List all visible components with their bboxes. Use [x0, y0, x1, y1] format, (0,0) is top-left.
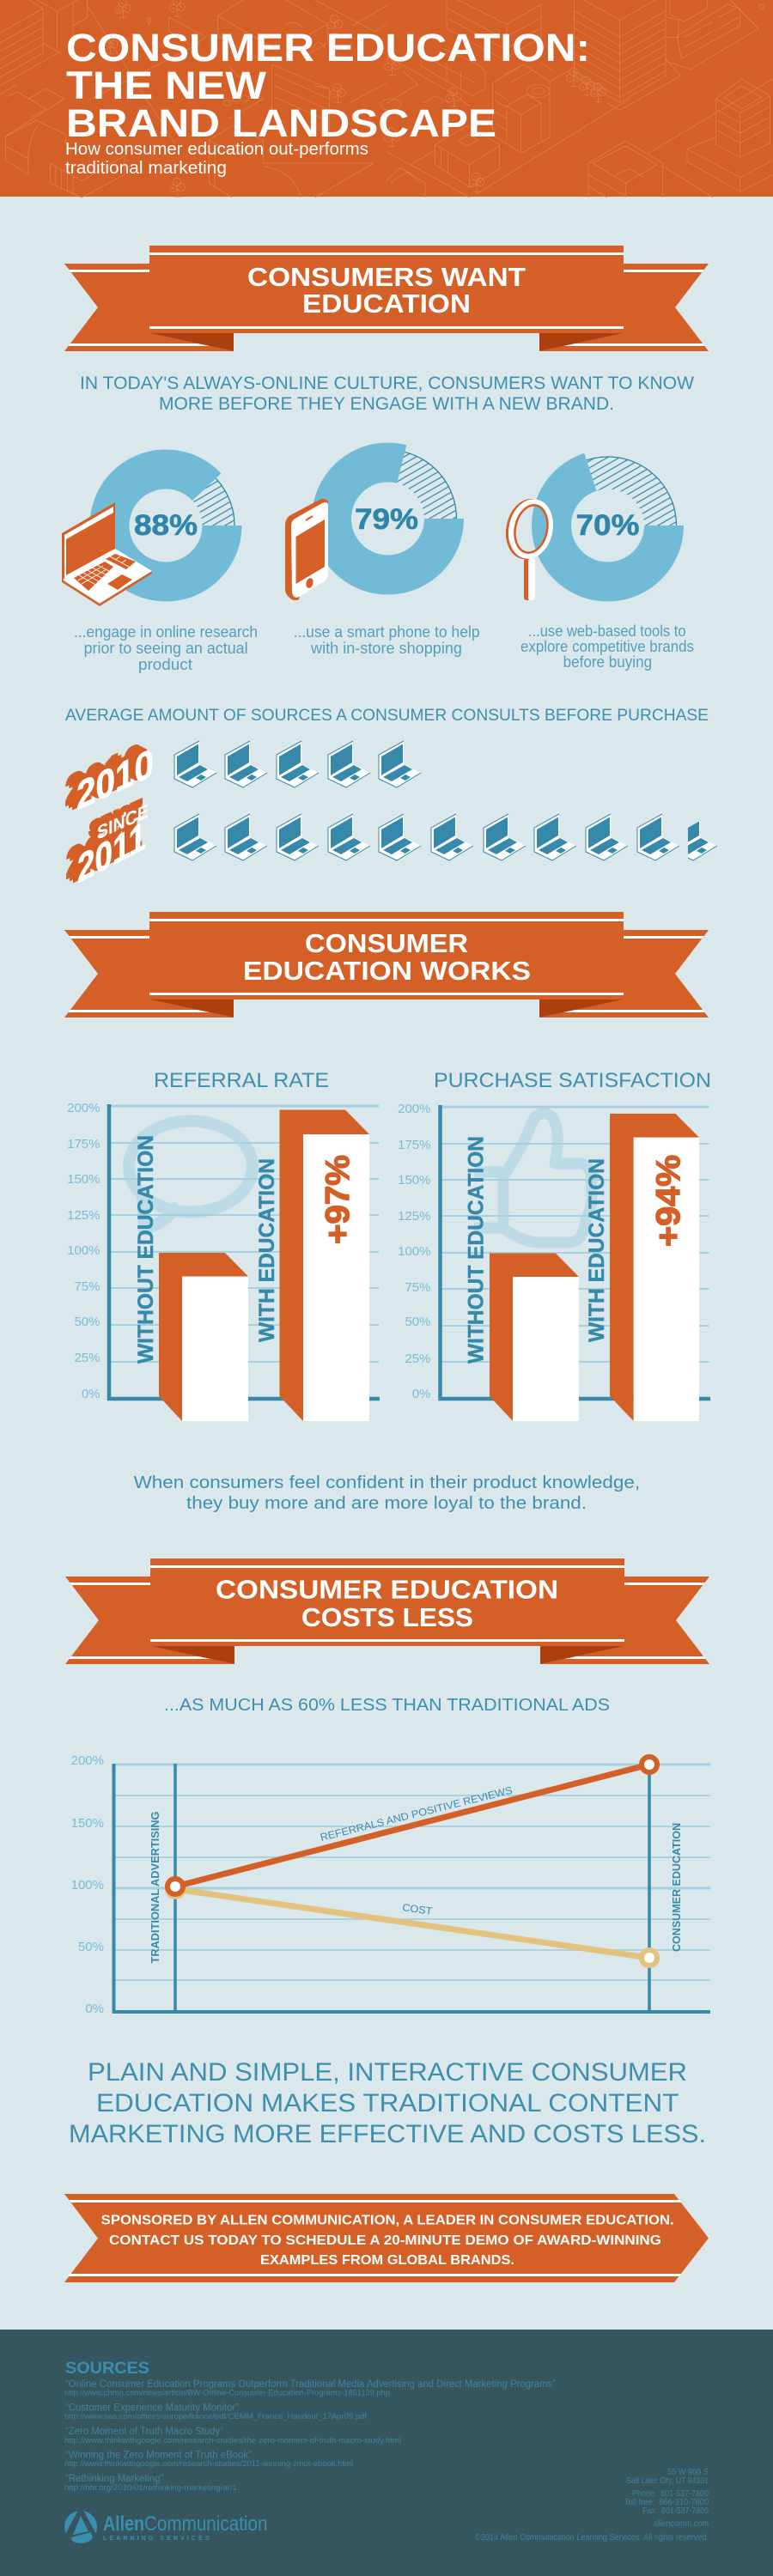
bar: without education: WITHOUT EDUCATION — [134, 1135, 158, 1364]
sponsor arrow banner: SPONSORED BY ALLEN COMMUNICATION, A LEADER IN CONSUMER EDUCATION. — [101, 2214, 674, 2228]
sources list: “Rethinking Marketing” — [65, 2474, 164, 2484]
intro text — [80, 374, 694, 414]
bar: with education: WITH EDUCATION — [255, 1158, 279, 1342]
year label since 2011: SINCE — [90, 796, 142, 841]
caption: product — [138, 656, 192, 673]
donut chart 79% — [312, 443, 464, 595]
ribbon heading — [243, 928, 531, 986]
y axis labels: 150% — [71, 1816, 104, 1831]
donut chart 88% — [89, 449, 242, 601]
ribbon heading: CONSUMER EDUCATION — [216, 1575, 558, 1604]
sources list: “Online Consumer Education Programs Outperform Traditional Media Advertising and Direct Marketing Programs” — [65, 2379, 556, 2390]
contact details: Toll free: 866-310-7800 — [624, 2497, 709, 2507]
sources list — [64, 2379, 556, 2493]
bar: without education — [134, 1135, 248, 1421]
caption: before buying — [563, 653, 652, 671]
year label since 2011: 2011 — [73, 811, 142, 890]
chart title: PURCHASE SATISFACTION — [434, 1069, 711, 1092]
bar: without education — [464, 1136, 579, 1421]
company logo — [60, 2506, 268, 2543]
donut chart 70%: 70% — [575, 509, 639, 542]
year label 2010: 2010 — [65, 735, 143, 814]
charts caption: When consumers feel confident in their product knowledge, — [134, 1473, 640, 1492]
closing statement: MARKETING MORE EFFECTIVE AND COSTS LESS. — [69, 2120, 706, 2148]
ribbon heading — [247, 262, 526, 319]
chart title: REFERRAL RATE — [154, 1069, 329, 1092]
y axis labels: 0% — [82, 1387, 100, 1401]
bar: with education — [255, 1109, 369, 1421]
y axis labels: 0% — [412, 1387, 431, 1401]
icon: smart phone — [285, 499, 328, 600]
y axis labels: 50% — [78, 1940, 104, 1954]
title: THE NEW — [66, 64, 267, 107]
subtitle: How consumer education out-performs — [65, 140, 368, 159]
sources list: “Customer Experience Maturity Monitor” — [65, 2403, 239, 2413]
line: referrals and positive reviews — [167, 1757, 657, 1894]
bar: with education: WITH EDUCATION — [585, 1158, 609, 1342]
y axis labels: 200% — [71, 1753, 104, 1768]
bar: without education: WITHOUT EDUCATION — [464, 1136, 488, 1364]
ribbon: consumer education costs less — [65, 1558, 709, 1664]
intro text: MORE BEFORE THEY ENGAGE WITH A NEW BRAND. — [159, 394, 614, 414]
charts caption: they buy more and are more loyal to the brand. — [186, 1494, 587, 1513]
caption: explore competitive brands — [520, 638, 694, 655]
stat: 79% smart phone — [285, 443, 480, 657]
y axis labels: 0% — [85, 2002, 104, 2016]
ribbon: consumer education works — [64, 912, 709, 1018]
series label: traditional advertising: TRADITIONAL ADVERTISING — [149, 1812, 161, 1963]
sources list: http://www.chron.com/news/article/BW-Online-Consumer-Education-Programs-1851139.php — [64, 2389, 390, 2397]
grid and axes — [109, 1104, 380, 1399]
y axis labels: 175% — [398, 1138, 431, 1152]
sponsor arrow banner — [64, 2194, 709, 2282]
laptops row 2010 — [174, 741, 421, 787]
bar: with education: +94% — [650, 1155, 687, 1247]
logo wordmark: Communication — [144, 2512, 268, 2536]
stat: 70% web-based tools — [502, 453, 694, 671]
contact details: Salt Lake City, UT 84101 — [626, 2476, 709, 2486]
cost subheading: ...AS MUCH AS 60% LESS THAN TRADITIONAL ADS — [164, 1696, 610, 1715]
y axis labels: 75% — [405, 1280, 431, 1295]
sources heading: SOURCES — [65, 2360, 149, 2378]
y axis labels: 150% — [67, 1172, 100, 1187]
sources list: http://www.thinkwithgoogle.com/research-studies/the-zero-moment-of-truth-macro-study.html — [64, 2436, 401, 2445]
closing statement: PLAIN AND SIMPLE, INTERACTIVE CONSUMER — [88, 2058, 687, 2087]
caption — [74, 623, 258, 673]
header city illustration — [0, 0, 773, 197]
series label: consumer education: CONSUMER EDUCATION — [670, 1823, 683, 1952]
ribbon heading: EDUCATION WORKS — [243, 956, 531, 986]
caption: ...use a smart phone to help — [294, 623, 480, 641]
subtitle: traditional marketing — [65, 159, 227, 178]
year label since 2011: SINCE — [97, 799, 149, 844]
year label since 2011: 2011 — [66, 808, 135, 887]
year label since 2011: 2011 — [77, 813, 146, 892]
contact details: ©2014 Allen Communication Learning Services. All rights reserved. — [475, 2532, 709, 2543]
y axis labels: 75% — [74, 1279, 100, 1294]
y axis labels: 100% — [67, 1243, 100, 1258]
ribbon heading — [216, 1575, 558, 1632]
y axis labels: 125% — [67, 1208, 100, 1223]
icon: magnifying glass — [502, 496, 556, 600]
y axis labels: 150% — [398, 1173, 431, 1188]
bar: with education: +97% — [320, 1155, 356, 1244]
y axis labels: 50% — [405, 1315, 431, 1329]
y axis labels: 25% — [74, 1351, 100, 1365]
sources heading: AVERAGE AMOUNT OF SOURCES A CONSUMER CONSULTS BEFORE PURCHASE — [65, 706, 709, 725]
chart: referral rate — [67, 1069, 380, 1421]
icon: thumbs up watermark — [474, 1113, 592, 1242]
contact details: Fax: 801-537-7805 — [642, 2506, 709, 2516]
icon: speech bubble watermark — [129, 1121, 253, 1230]
y axis labels: 50% — [74, 1315, 100, 1329]
caption — [520, 623, 694, 671]
line: cost: COST — [402, 1901, 434, 1917]
logo tagline: LEARNING SERVICES — [103, 2536, 210, 2542]
footer panel — [0, 2330, 773, 2576]
ribbon heading: CONSUMERS WANT — [247, 262, 526, 292]
closing statement — [69, 2058, 706, 2148]
charts caption — [134, 1473, 640, 1513]
caption: with in-store shopping — [310, 640, 462, 657]
sources list: http://hbr.org/2010/01/rethinking-marketing/ar/1 — [64, 2483, 237, 2493]
title: CONSUMER EDUCATION: — [66, 26, 590, 70]
sponsor arrow banner: EXAMPLES FROM GLOBAL BRANDS. — [260, 2253, 514, 2268]
year label 2010: 2010 — [76, 740, 154, 819]
closing statement: EDUCATION MAKES TRADITIONAL CONTENT — [96, 2089, 679, 2117]
contact details — [475, 2467, 709, 2543]
ribbon heading: CONSUMER — [305, 928, 468, 958]
donut chart 70% — [532, 453, 684, 601]
y axis labels: 200% — [398, 1102, 431, 1116]
caption: ...use web-based tools to — [528, 623, 685, 640]
y axis labels — [71, 1753, 104, 2016]
logo wordmark: Allen — [103, 2512, 144, 2536]
title: BRAND LANDSCAPE — [66, 101, 496, 145]
header panel — [0, 0, 773, 197]
grid and axes — [113, 1764, 710, 2012]
title — [66, 26, 590, 145]
donut chart 79%: 79% — [355, 503, 418, 536]
laptops row since 2011 — [174, 814, 717, 860]
line chart: cost vs referrals — [71, 1753, 710, 2016]
year label since 2011: 2011 — [70, 810, 138, 889]
donut chart 88%: 88% — [134, 509, 198, 542]
caption: ...engage in online research — [74, 623, 258, 641]
ribbon heading: EDUCATION — [302, 289, 471, 319]
sponsor arrow banner: CONTACT US TODAY TO SCHEDULE A 20-MINUTE DEMO OF AWARD-WINNING — [109, 2233, 661, 2248]
sources list: “Winning the Zero Moment of Truth eBook” — [65, 2451, 252, 2461]
line: cost — [167, 1881, 657, 1965]
y axis labels: 175% — [67, 1137, 100, 1151]
sources list: http://www.thinkwithgoogle.com/research-studies/2011-winning-zmot-ebook.html — [64, 2459, 353, 2469]
y axis labels — [67, 1101, 100, 1401]
y axis labels: 125% — [398, 1209, 431, 1224]
year label 2010: 2010 — [69, 737, 146, 816]
y axis labels: 100% — [71, 1878, 104, 1893]
stat: 88% online research — [62, 449, 258, 673]
y axis labels: 25% — [405, 1352, 431, 1366]
contact details: allencomm.com — [654, 2518, 709, 2529]
y axis labels: 100% — [398, 1244, 431, 1259]
contact details: 55 W 900 S — [667, 2467, 709, 2477]
subtitle — [65, 140, 368, 178]
intro text: IN TODAY'S ALWAYS-ONLINE CULTURE, CONSUMERS WANT TO KNOW — [80, 374, 694, 393]
sources list: http://www.sas.com/offices/europe/france/pdf/CEMM_France_Handout_17Apr09.pdf — [64, 2412, 367, 2421]
y axis labels — [398, 1102, 431, 1401]
ribbon heading: COSTS LESS — [301, 1602, 473, 1632]
chart: purchase satisfaction — [398, 1069, 711, 1421]
icon: laptop — [62, 502, 152, 606]
ribbon: consumers want education — [64, 246, 709, 351]
grid and axes — [440, 1105, 710, 1399]
y axis labels: 200% — [67, 1101, 100, 1115]
caption — [294, 623, 480, 657]
line: referrals and positive reviews: REFERRALS AND POSITIVE REVIEWS — [319, 1784, 514, 1844]
bar: with education — [585, 1114, 699, 1421]
sources list: “Zero Moment of Truth Macro Study” — [65, 2427, 223, 2437]
caption: prior to seeing an actual — [84, 640, 248, 657]
logo mark — [60, 2506, 101, 2543]
year label 2010: 2010 — [72, 738, 149, 817]
contact details: Phone: 801-537-7800 — [632, 2488, 709, 2499]
